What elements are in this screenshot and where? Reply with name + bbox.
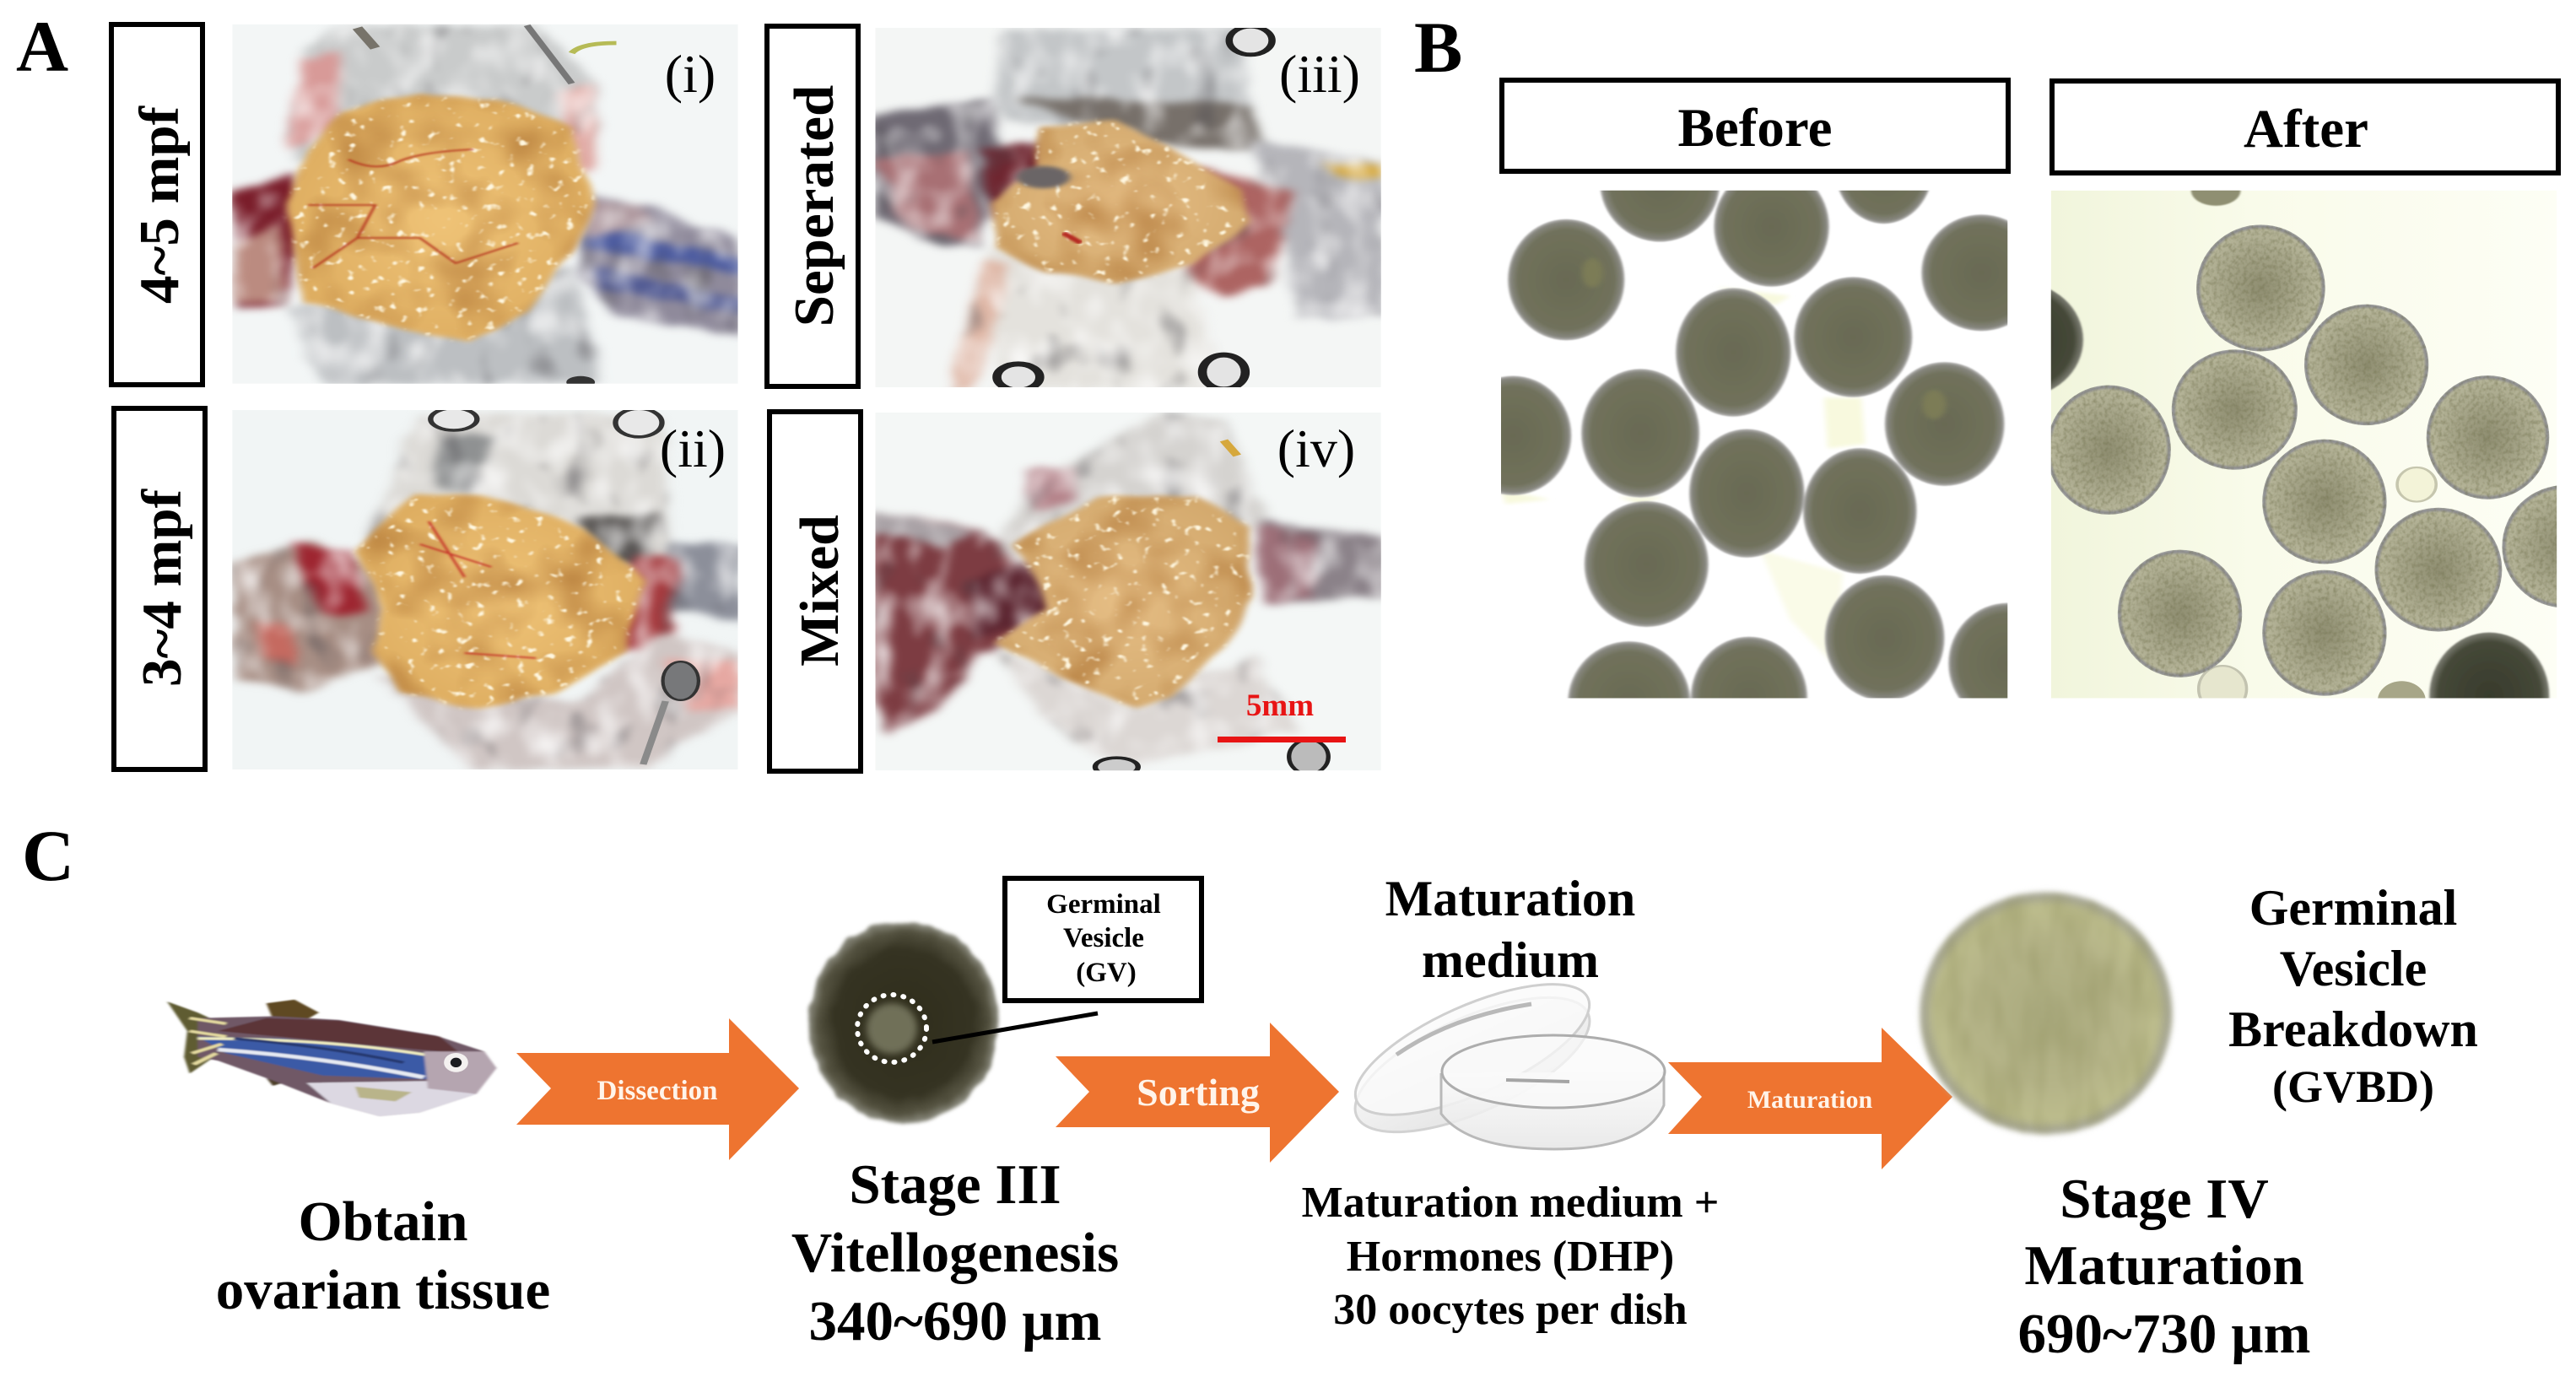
photo: ovary i — [232, 24, 742, 388]
arrow: Dissection — [516, 1018, 799, 1160]
text: Obtain ovarian tissue — [216, 1190, 550, 1321]
arrow: Sorting — [1056, 1023, 1339, 1163]
heading box: After — [2052, 81, 2558, 173]
photo: ovary iii — [871, 26, 1385, 391]
panel A: row label 4~5 mpf — [111, 24, 203, 385]
panel labels: roman numerals: (iv) — [1277, 418, 1355, 478]
callout: Germinal Vesicle (GV): Germinal — [1046, 889, 1161, 920]
photo: ovary ii — [232, 408, 742, 769]
panel A: row label Seperated: Seperated — [783, 85, 845, 327]
photo: oocytes after — [2050, 191, 2557, 699]
panel A: row label Mixed — [770, 412, 861, 771]
text: Stage III Vitellogenesis: 340~690 µm — [808, 1290, 1102, 1352]
text: Obtain ovarian tissue: ovarian tissue — [216, 1259, 550, 1321]
text: Obtain ovarian tissue: Obtain — [298, 1190, 468, 1253]
callout: Germinal Vesicle (GV) — [1005, 878, 1202, 1001]
panel A: row label 4~5 mpf: 4~5 mpf — [128, 105, 191, 304]
panel C label: C — [22, 815, 74, 896]
text: Stage III Vitellogenesis: Stage III — [849, 1153, 1061, 1216]
text: Stage III Vitellogenesis — [791, 1153, 1119, 1352]
panel A: row label Seperated — [767, 26, 858, 386]
text: Germinal Vesicle Breakdown (GVBD) — [2228, 880, 2478, 1112]
text: Germinal Vesicle Breakdown (GVBD): Vesicle — [2280, 941, 2427, 996]
panel A: row label 3~4 mpf — [114, 408, 205, 769]
scale bar: 5mm — [1218, 688, 1346, 742]
arrow: Dissection: Dissection — [597, 1076, 717, 1106]
oocyte: stage IV — [1920, 892, 2173, 1135]
oocyte: stage III with germinal vesicle — [808, 921, 1098, 1124]
panel B label: B — [1414, 7, 1462, 88]
arrow: Sorting: Sorting — [1137, 1071, 1260, 1114]
scale bar: 5mm: 5mm — [1246, 688, 1314, 723]
text: Maturation medium heading: Maturation — [1385, 871, 1635, 926]
text: Maturation medium heading: medium — [1422, 932, 1599, 988]
icon: zebrafish — [167, 1000, 496, 1116]
callout: Germinal Vesicle (GV): (GV) — [1076, 958, 1137, 988]
text: medium and hormones: 30 oocytes per dish — [1333, 1286, 1688, 1334]
text: Stage IV Maturation: 690~730 µm — [2017, 1303, 2311, 1365]
panel A: row label 3~4 mpf: 3~4 mpf — [131, 489, 193, 687]
arrow: Maturation: Maturation — [1747, 1086, 1872, 1114]
panel labels: roman numerals — [660, 44, 1360, 478]
text: Germinal Vesicle Breakdown (GVBD): Breakdown — [2228, 1001, 2478, 1057]
photo: ovary iv — [871, 413, 1385, 776]
text: medium and hormones: Hormones (DHP) — [1347, 1233, 1674, 1281]
panel A: row label Mixed: Mixed — [789, 515, 851, 667]
text: Maturation medium heading — [1385, 871, 1635, 988]
icon: petri dish — [1337, 958, 1665, 1159]
callout: Germinal Vesicle (GV): Vesicle — [1063, 923, 1144, 953]
text: medium and hormones: Maturation medium + — [1302, 1179, 1719, 1227]
text: Germinal Vesicle Breakdown (GVBD): (GVBD) — [2272, 1061, 2434, 1112]
text: Stage III Vitellogenesis: Vitellogenesis — [791, 1222, 1119, 1284]
heading box: Before — [1502, 80, 2008, 171]
arrow: Maturation — [1668, 1028, 1952, 1169]
text: medium and hormones — [1302, 1179, 1719, 1334]
text: Stage IV Maturation: Maturation — [2024, 1234, 2304, 1297]
photo: oocytes before — [1455, 109, 2066, 764]
text: Stage IV Maturation — [2017, 1168, 2311, 1365]
panel A label: A — [16, 6, 68, 87]
text: Stage IV Maturation: Stage IV — [2060, 1168, 2269, 1230]
panel labels: roman numerals: (iii) — [1279, 44, 1360, 104]
heading box: After: After — [2244, 99, 2368, 159]
panel labels: roman numerals: (ii) — [660, 418, 726, 478]
heading box: Before: Before — [1678, 98, 1832, 159]
text: Germinal Vesicle Breakdown (GVBD): Germinal — [2249, 880, 2457, 936]
panel labels: roman numerals: (i) — [665, 44, 716, 104]
